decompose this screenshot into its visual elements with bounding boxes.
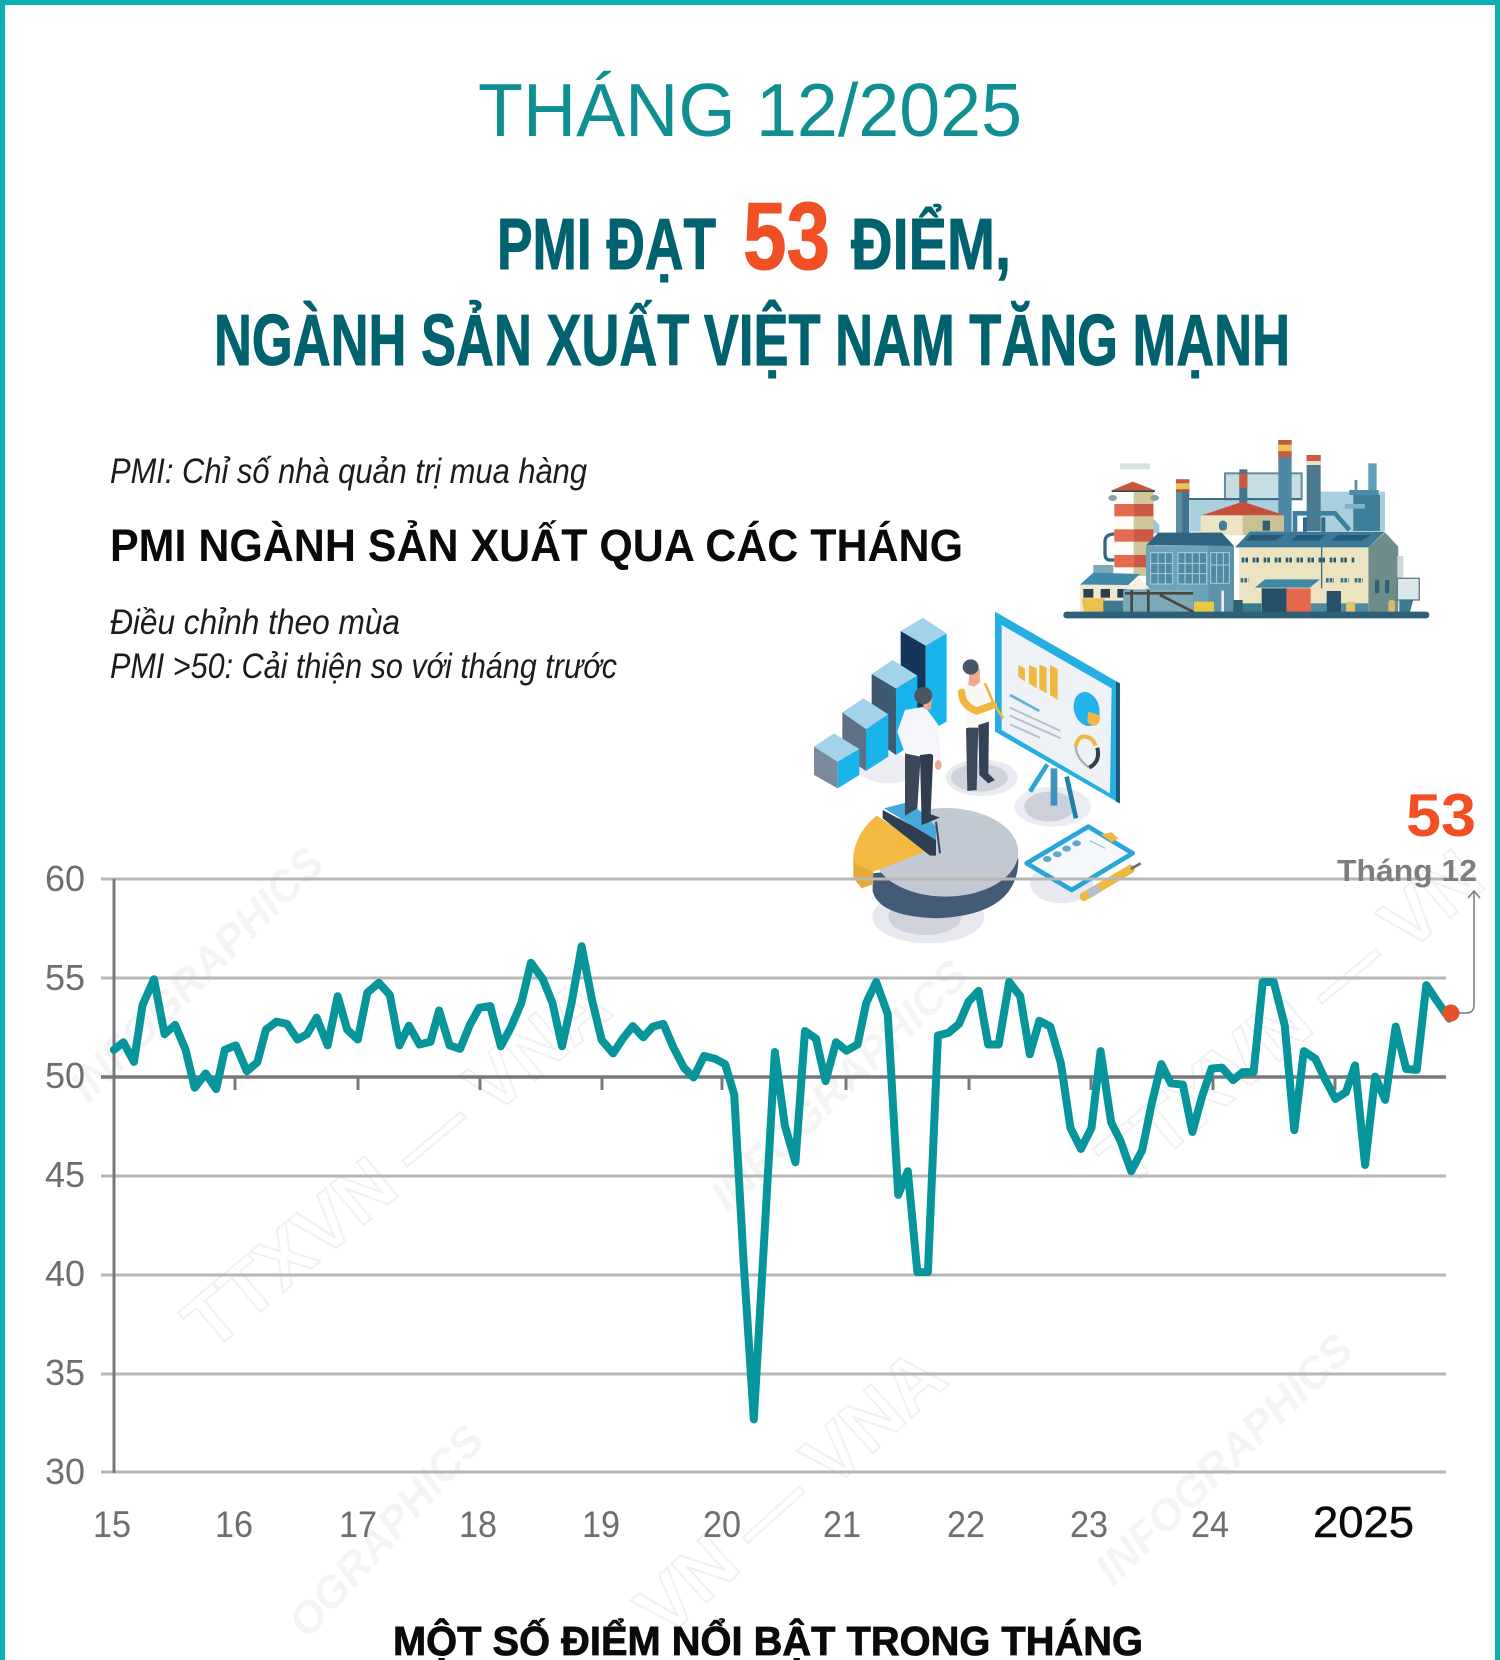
y axis labels: 30 (45, 1451, 85, 1492)
chart notes (110, 603, 617, 686)
headline line 1 end: ĐIỂM, (851, 204, 1011, 285)
headline number 53: 53 (743, 183, 830, 290)
x axis labels: 17 (339, 1504, 377, 1545)
icon: data analysts with charts (814, 612, 1141, 943)
x axis labels (93, 1504, 1229, 1545)
latest value month: Tháng 12 (1337, 853, 1477, 888)
watermarks (60, 834, 1499, 1653)
watermarks: TTXVN — VN (1082, 834, 1499, 1203)
clipboard (1027, 827, 1141, 897)
watermarks: INFOGRAPHICS (60, 838, 334, 1111)
latest value marker (1442, 1004, 1460, 1022)
x axis labels: 21 (823, 1504, 861, 1545)
x axis labels: 24 (1191, 1504, 1229, 1545)
watermarks: VN — VNA (619, 1332, 962, 1653)
definition note: PMI: Chỉ số nhà quản trị mua hàng (110, 452, 587, 491)
y axis labels: 50 (45, 1055, 85, 1096)
headline (214, 183, 1290, 381)
person presenting (962, 659, 1003, 791)
y axis labels: 55 (45, 957, 85, 998)
chart notes: PMI >50: Cải thiện so với tháng trước (110, 647, 617, 686)
PMI line (114, 946, 1449, 1419)
x axis labels: 23 (1070, 1504, 1108, 1545)
chart heading: PMI NGÀNH SẢN XUẤT QUA CÁC THÁNG (110, 520, 963, 571)
pedestal (883, 802, 940, 856)
latest value 53: 53 (1406, 782, 1476, 849)
watermarks: INFOGRAPHICS (1086, 1325, 1363, 1594)
arrow to latest value label (1459, 891, 1480, 1013)
watermarks: OGRAPHICS (279, 1416, 494, 1647)
presentation board (995, 612, 1120, 818)
y axis labels: 60 (45, 858, 85, 899)
y axis labels: 40 (45, 1253, 85, 1294)
pie chart disc (853, 808, 1018, 918)
headline line 1 start: PMI ĐẠT (497, 205, 716, 285)
x axis labels: 20 (703, 1504, 741, 1545)
axis and baseline at 50 (101, 879, 1446, 1473)
x axis labels: 19 (582, 1504, 620, 1545)
x axis labels: 18 (459, 1504, 497, 1545)
watermarks: TTXVN — VNA (167, 962, 626, 1366)
x axis labels: 16 (215, 1504, 253, 1545)
bar chart blocks (814, 618, 947, 788)
gridlines (101, 879, 1446, 1472)
line chart (45, 782, 1480, 1547)
icon: factory (1063, 440, 1429, 618)
title: month: THÁNG 12/2025 (478, 68, 1022, 152)
floor shadows (858, 753, 1093, 943)
watermarks: INFOGRAPHICS (701, 951, 978, 1220)
y axis labels: 45 (45, 1154, 85, 1195)
chart notes: Điều chỉnh theo mùa (110, 603, 400, 642)
y axis labels (45, 858, 85, 1492)
person standing (897, 687, 942, 825)
y axis labels: 35 (45, 1352, 85, 1393)
x axis labels: 22 (947, 1504, 985, 1545)
x axis labels: 15 (93, 1504, 131, 1545)
x axis label 2025: 2025 (1313, 1498, 1414, 1547)
